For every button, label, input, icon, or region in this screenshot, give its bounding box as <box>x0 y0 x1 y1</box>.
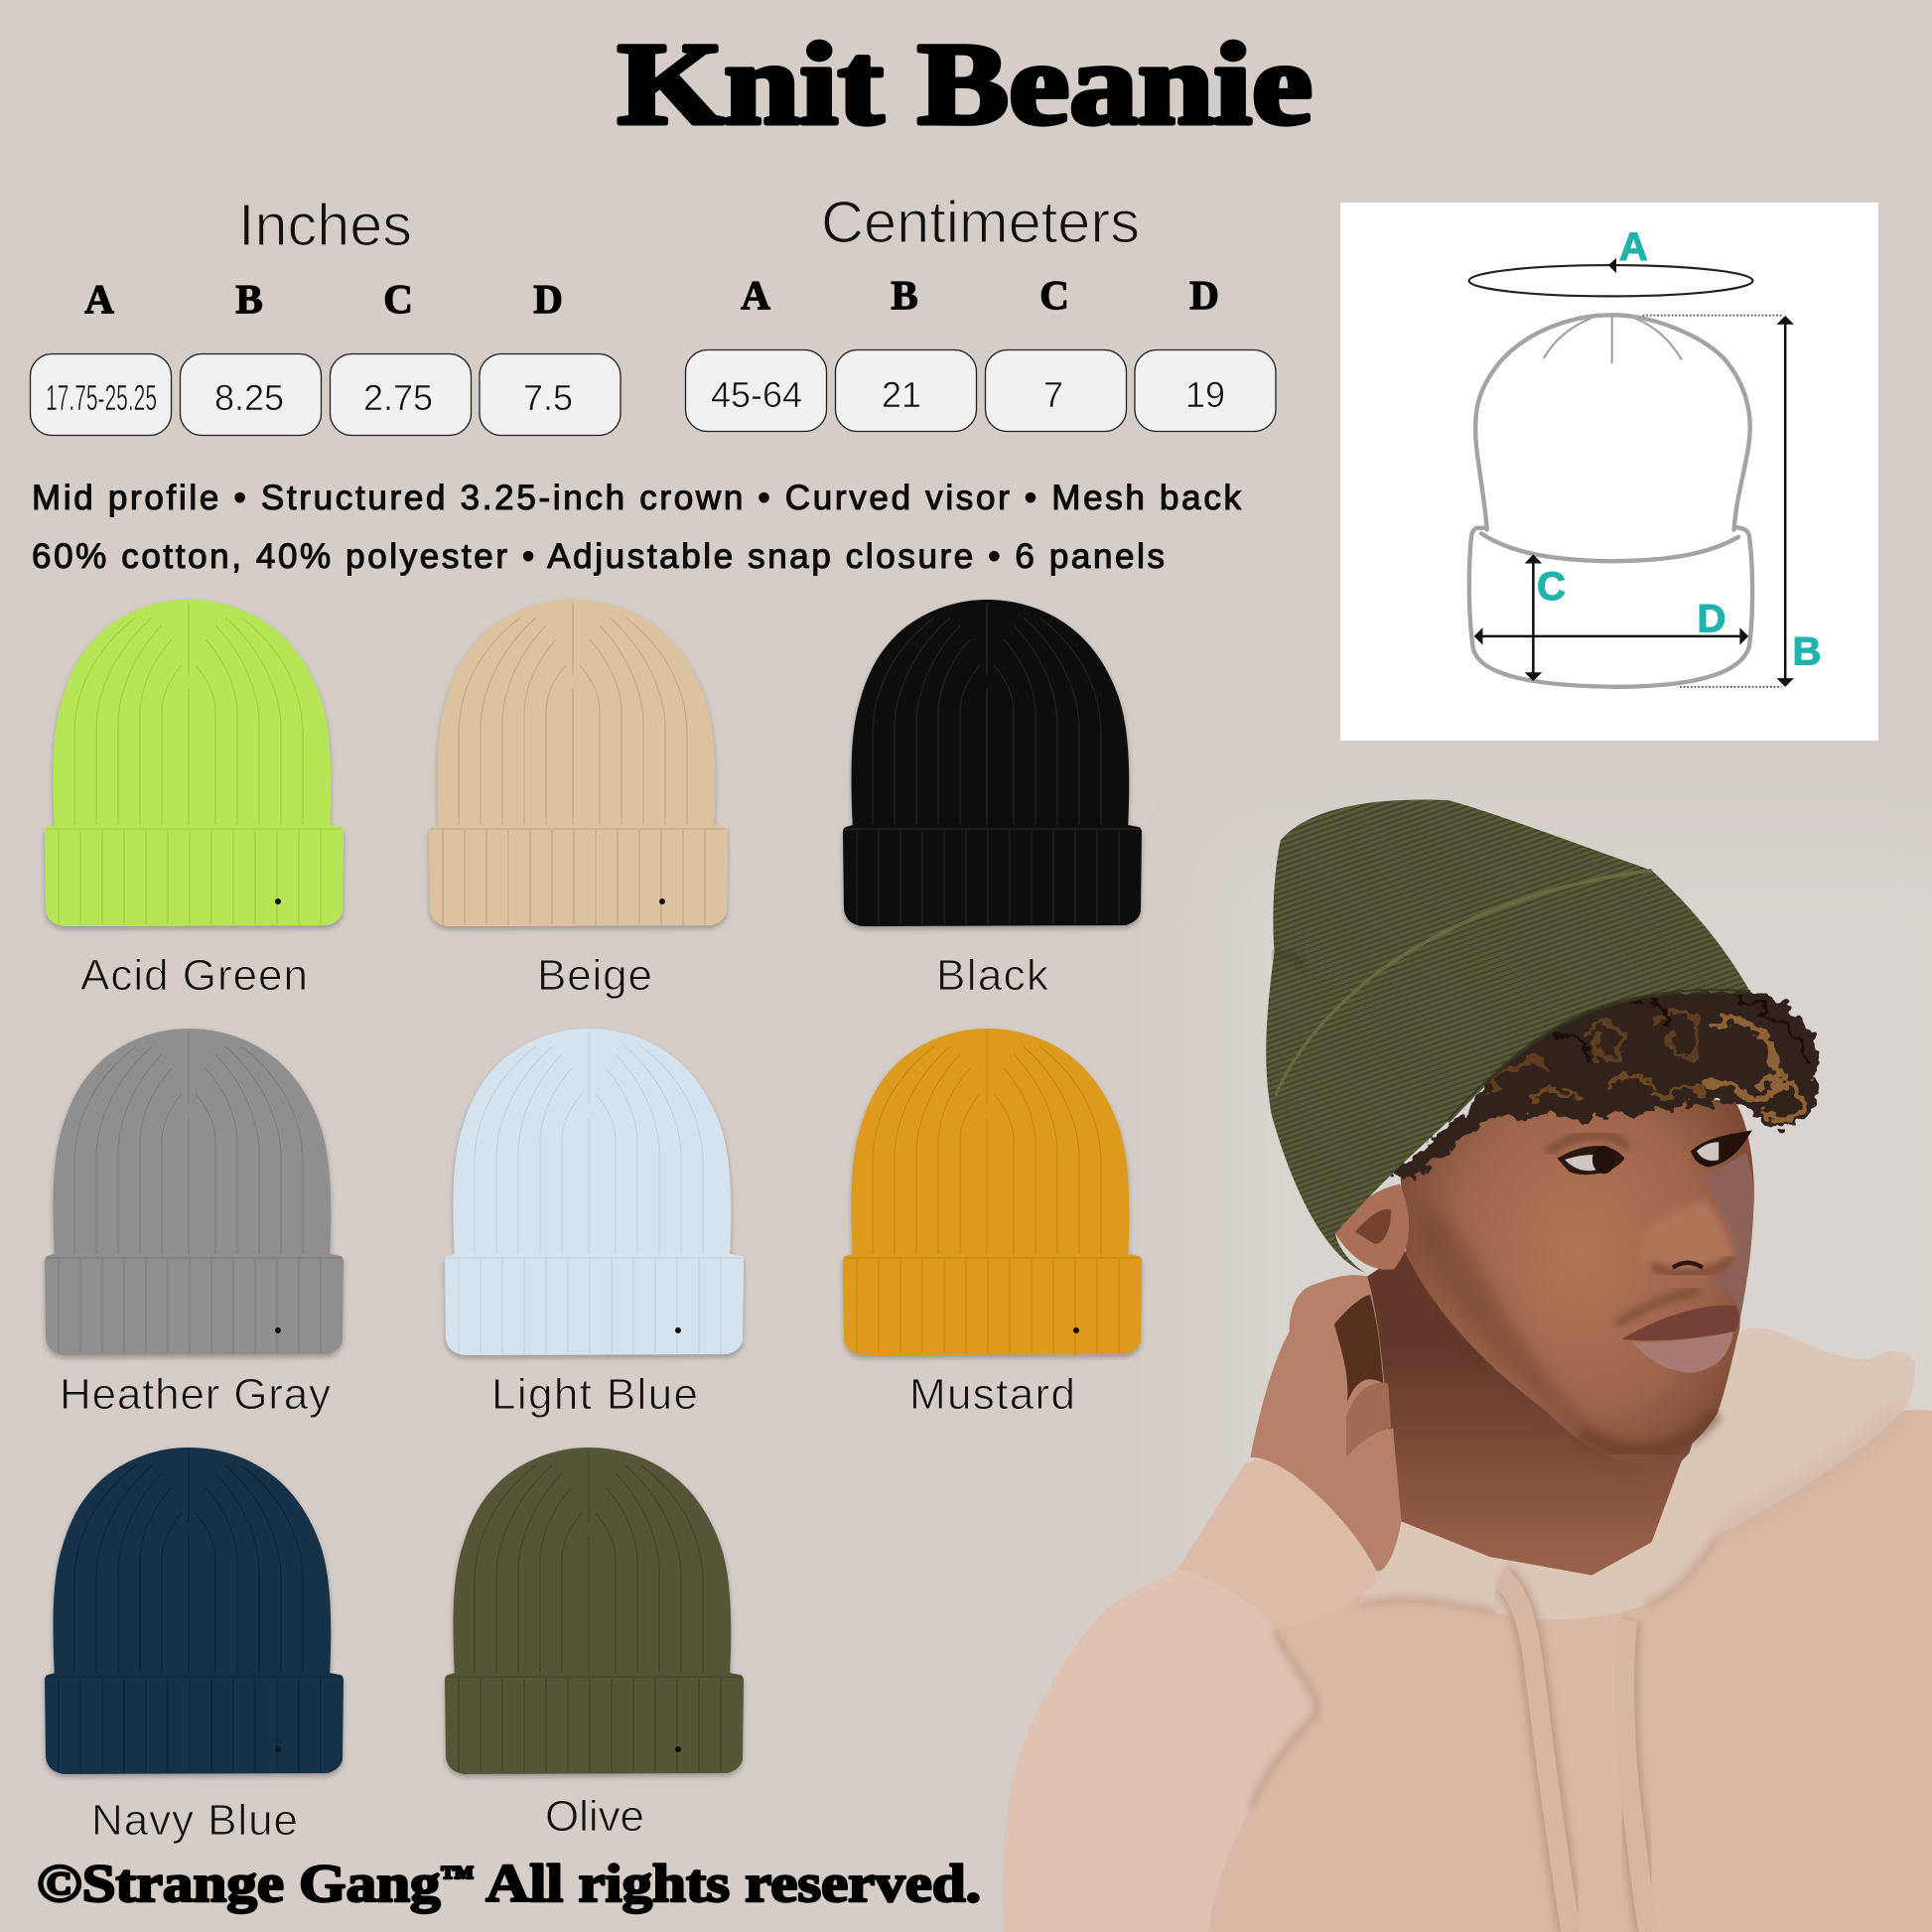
hair <box>1388 989 1819 1179</box>
inches value boxes: 7.5 <box>523 377 573 418</box>
panel: measurement diagram <box>1340 203 1878 741</box>
label: Heather Gray: Heather Gray <box>60 1370 331 1419</box>
label: Acid Green: Acid Green <box>80 951 308 1000</box>
label: Light Blue: Light Blue <box>491 1370 698 1419</box>
right eye <box>1691 1130 1752 1168</box>
beanie: Acid Green <box>45 600 344 926</box>
beanie: Black <box>843 600 1142 926</box>
centimeters column letters: D <box>1189 272 1219 318</box>
beanie: Light Blue <box>445 1029 744 1355</box>
feature list text <box>32 479 1241 576</box>
footer copyright <box>37 1854 981 1913</box>
inches column letters: A <box>84 276 114 322</box>
inches column letters: C <box>383 276 413 322</box>
arrow: D width <box>1474 598 1748 645</box>
inches column letters: B <box>235 276 263 322</box>
centimeters column letters: A <box>741 272 770 318</box>
photo: model wearing olive beanie <box>1003 799 1932 1932</box>
inches column letters <box>84 276 563 322</box>
mouth <box>1615 1292 1738 1372</box>
feature list text: 60% cotton, 40% polyester • Adjustable snap closure • 6 panels <box>32 537 1165 576</box>
beanie: Olive <box>445 1448 744 1774</box>
icon: circumference ellipse A: A <box>1619 225 1648 269</box>
left eye <box>1547 1135 1629 1174</box>
centimeters value boxes: 21 <box>882 374 921 415</box>
panel: centimeters sizes <box>685 190 1276 431</box>
footer copyright: ™ <box>441 1861 474 1893</box>
label: Navy Blue: Navy Blue <box>91 1796 298 1845</box>
icon: beanie outline <box>1469 315 1752 687</box>
inches value boxes: 17.75-25.25 <box>46 377 157 418</box>
hoodie drawstrings <box>1502 1580 1649 1932</box>
inches value boxes: 2.75 <box>363 377 433 418</box>
heading: inches: Inches <box>238 193 412 258</box>
arrow: B height: B <box>1792 629 1821 673</box>
arrow: B height <box>1643 316 1821 687</box>
arrow: D width: D <box>1697 598 1725 641</box>
centimeters value boxes: 19 <box>1185 374 1225 415</box>
face <box>1400 1097 1754 1464</box>
panel: inches sizes <box>30 193 621 435</box>
olive knit beanie <box>1266 799 1750 1273</box>
arrow: C cuff height <box>1525 554 1566 681</box>
beanie: Heather Gray <box>45 1029 344 1355</box>
inches value boxes: 8.25 <box>214 377 284 418</box>
inches value boxes <box>30 353 621 435</box>
heading: centimeters: Centimeters <box>821 190 1140 255</box>
beanie: Mustard <box>843 1029 1142 1355</box>
centimeters column letters: B <box>891 272 918 318</box>
beanie: Navy Blue <box>45 1448 344 1774</box>
feature list text: Mid profile • Structured 3.25-inch crown • Curved visor • Mesh back <box>32 479 1241 517</box>
centimeters column letters <box>741 272 1219 318</box>
arrow: C cuff height: C <box>1537 565 1566 609</box>
centimeters value boxes: 7 <box>1043 374 1063 415</box>
title: Knit Beanie <box>618 19 1312 149</box>
centimeters value boxes <box>685 349 1276 431</box>
ear <box>1335 1184 1409 1270</box>
neck <box>1367 1247 1694 1587</box>
icon: circumference ellipse A <box>1469 225 1752 296</box>
centimeters column letters: C <box>1039 272 1069 318</box>
hand <box>1250 1275 1401 1571</box>
inches column letters: D <box>533 276 563 322</box>
beanie: Beige <box>429 600 728 926</box>
centimeters value boxes: 45-64 <box>711 374 802 415</box>
label: Black: Black <box>936 951 1049 1000</box>
hoodie <box>1003 1328 1932 1932</box>
label: Mustard: Mustard <box>909 1370 1075 1419</box>
footer copyright: All rights reserved. <box>474 1854 981 1913</box>
footer copyright: ©Strange Gang <box>37 1854 394 1913</box>
label: Olive: Olive <box>545 1792 644 1841</box>
label: Beige: Beige <box>537 951 652 1000</box>
nose <box>1639 1199 1734 1275</box>
